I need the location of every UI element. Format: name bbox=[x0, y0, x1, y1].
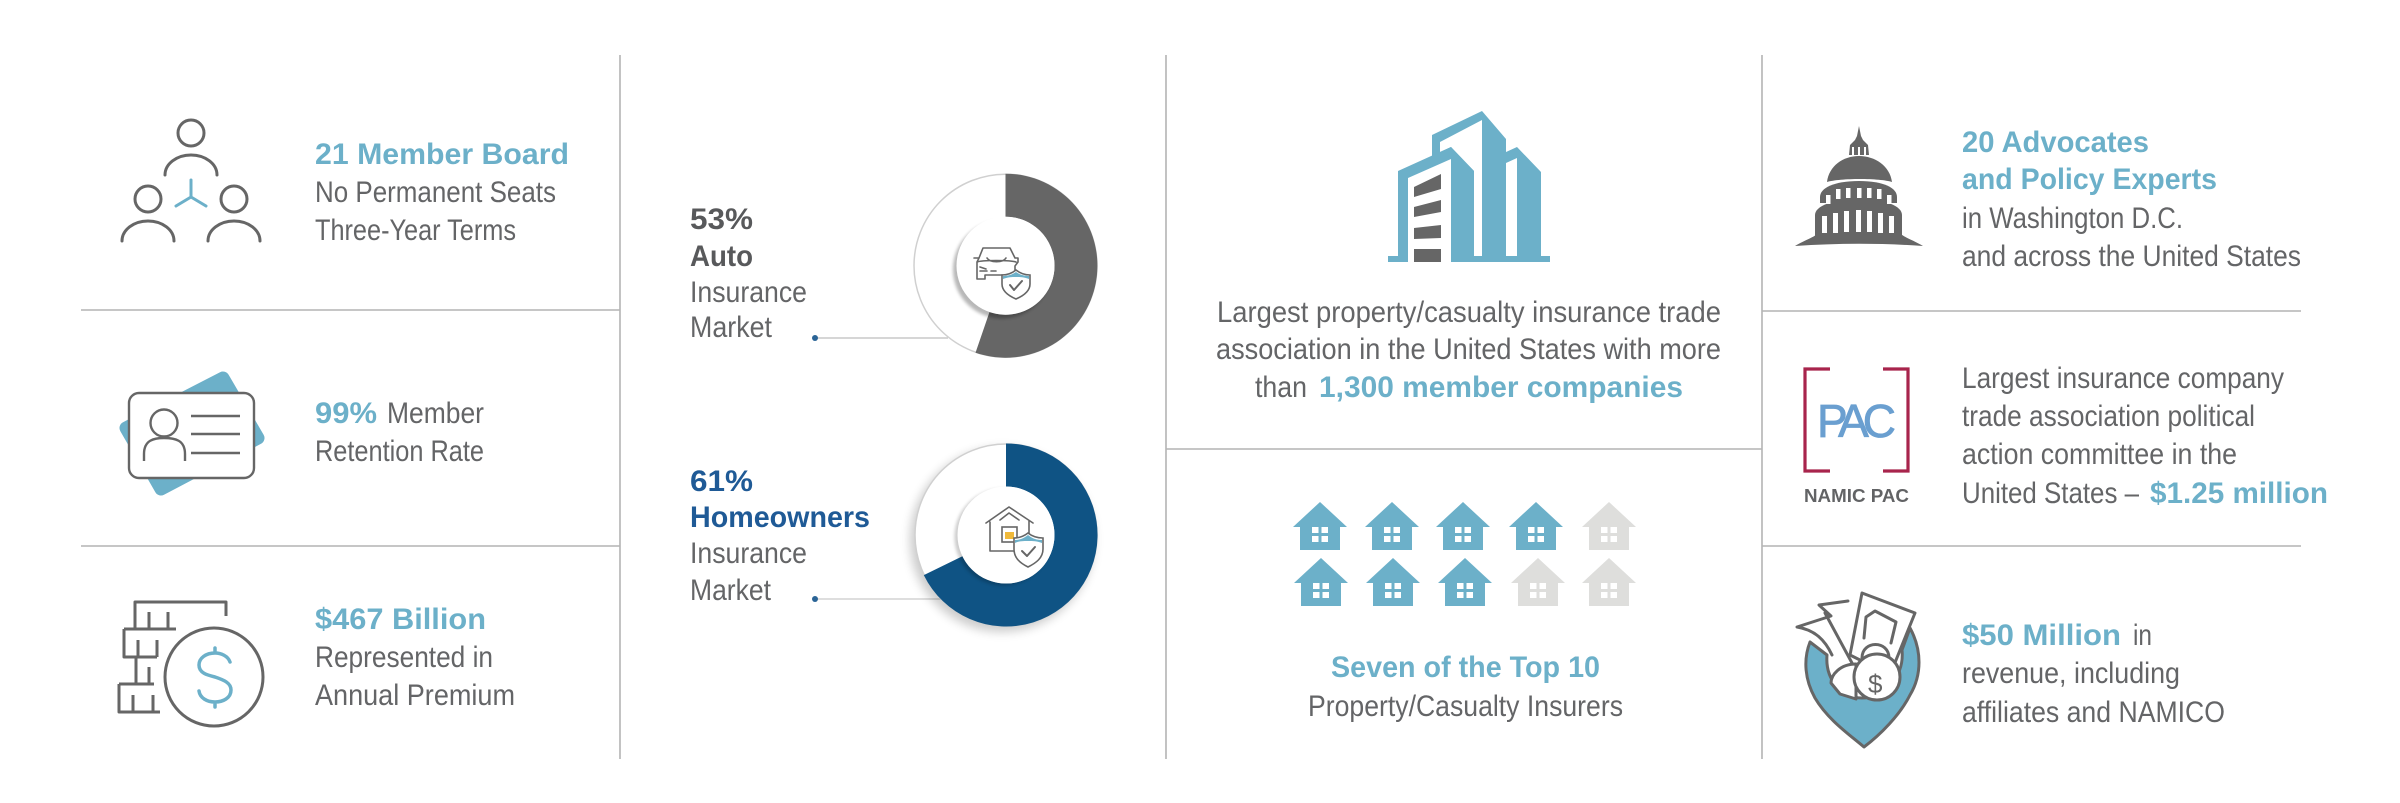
text: association description: association in the United States with more bbox=[1216, 333, 1721, 366]
panel: annual premium bbox=[119, 602, 515, 726]
text: member: Member bbox=[387, 397, 484, 430]
text: annual premium: Annual Premium bbox=[315, 679, 515, 712]
text: revenue including affiliates: affiliates and NAMICO bbox=[1962, 696, 2225, 729]
icon: three people board bbox=[122, 120, 260, 241]
text: political action committee: action committee in the bbox=[1962, 438, 2237, 471]
icon: house with shield bbox=[986, 507, 1043, 567]
panel: advocates bbox=[1795, 126, 2301, 273]
stat: 61%: 61% bbox=[690, 465, 753, 498]
panel: revenue bbox=[1797, 593, 2225, 747]
icon: car with shield bbox=[974, 248, 1030, 299]
label: homeowners: Homeowners bbox=[690, 501, 870, 534]
text: no permanent seats: No Permanent Seats bbox=[315, 176, 556, 209]
heading: 20 advocates and policy experts bbox=[1962, 126, 2217, 196]
heading: 20 advocates and policy experts: 20 Advocates bbox=[1962, 126, 2149, 159]
text: insurance: Insurance bbox=[690, 276, 807, 309]
pictogram: seven of ten houses bbox=[1293, 502, 1636, 606]
panel: top 10 insurers bbox=[1293, 502, 1636, 723]
stat: $50 million in: in bbox=[2133, 619, 2152, 652]
text: association description: than bbox=[1255, 371, 1307, 404]
stat: 53%: 53% bbox=[690, 203, 753, 236]
logo: NAMIC PAC bbox=[1804, 369, 1909, 506]
icon: stacked bills and dollar coin bbox=[119, 602, 263, 726]
panel: board facts bbox=[122, 120, 569, 247]
text: political action committee: United States – bbox=[1962, 477, 2140, 510]
heading: 20 advocates and policy experts: and Policy Experts bbox=[1962, 163, 2217, 196]
text: washington and across the US: in Washington D.C. bbox=[1962, 202, 2183, 235]
leader line with dot bbox=[812, 335, 948, 341]
panel: auto insurance market bbox=[690, 174, 1097, 358]
donut chart: 61% homeowners bbox=[910, 443, 1098, 632]
label: auto: Auto bbox=[690, 240, 753, 273]
stat: $50 million in: $50 Million bbox=[1962, 619, 2121, 652]
text: property/casualty insurers: Property/Casualty Insurers bbox=[1308, 690, 1623, 723]
heading: 21 Member Board: 21 Member Board bbox=[315, 138, 569, 171]
donut chart: 53% auto bbox=[914, 174, 1097, 358]
text: association description bbox=[1216, 296, 1721, 404]
leader line with dot bbox=[812, 596, 945, 602]
icon: office buildings bbox=[1388, 111, 1550, 262]
text: revenue including affiliates bbox=[1962, 657, 2225, 729]
icon: ID card bbox=[126, 378, 258, 489]
text: represented in: Represented in bbox=[315, 641, 493, 674]
text: washington and across the US bbox=[1962, 202, 2301, 273]
panel: homeowners insurance market bbox=[690, 443, 1098, 632]
text: association description: 1,300 member companies bbox=[1319, 371, 1683, 404]
text: insurance: Insurance bbox=[690, 537, 807, 570]
text: washington and across the US: and across the United States bbox=[1962, 240, 2301, 273]
heading: $467 Billion: $467 Billion bbox=[315, 603, 486, 636]
icon: money in location pin: $ bbox=[1868, 669, 1883, 699]
text: political action committee bbox=[1962, 362, 2328, 510]
text: political action committee: $1.25 million bbox=[2150, 477, 2328, 510]
stat: 99% member: 99% bbox=[315, 397, 377, 430]
icon: capitol dome bbox=[1795, 126, 1923, 246]
text: political action committee: Largest insurance company bbox=[1962, 362, 2284, 395]
heading: seven of the top 10: Seven of the Top 10 bbox=[1331, 651, 1600, 684]
panel: NAMIC PAC bbox=[1804, 362, 2328, 510]
text: association description: Largest property/casualty insurance trade bbox=[1217, 296, 1721, 329]
panel: largest trade association bbox=[1216, 111, 1721, 404]
text: market: Market bbox=[690, 574, 771, 607]
text: market: Market bbox=[690, 311, 772, 344]
icon: money in location pin bbox=[1797, 593, 1919, 747]
text: three-year terms: Three-Year Terms bbox=[315, 214, 516, 247]
logo: NAMIC PAC: NAMIC PAC bbox=[1804, 486, 1909, 506]
text: retention rate: Retention Rate bbox=[315, 435, 484, 468]
logo: NAMIC PAC: PAC bbox=[1817, 395, 1896, 447]
text: revenue including affiliates: revenue, including bbox=[1962, 657, 2180, 690]
panel: member retention bbox=[126, 378, 484, 489]
text: political action committee: trade association political bbox=[1962, 400, 2255, 433]
